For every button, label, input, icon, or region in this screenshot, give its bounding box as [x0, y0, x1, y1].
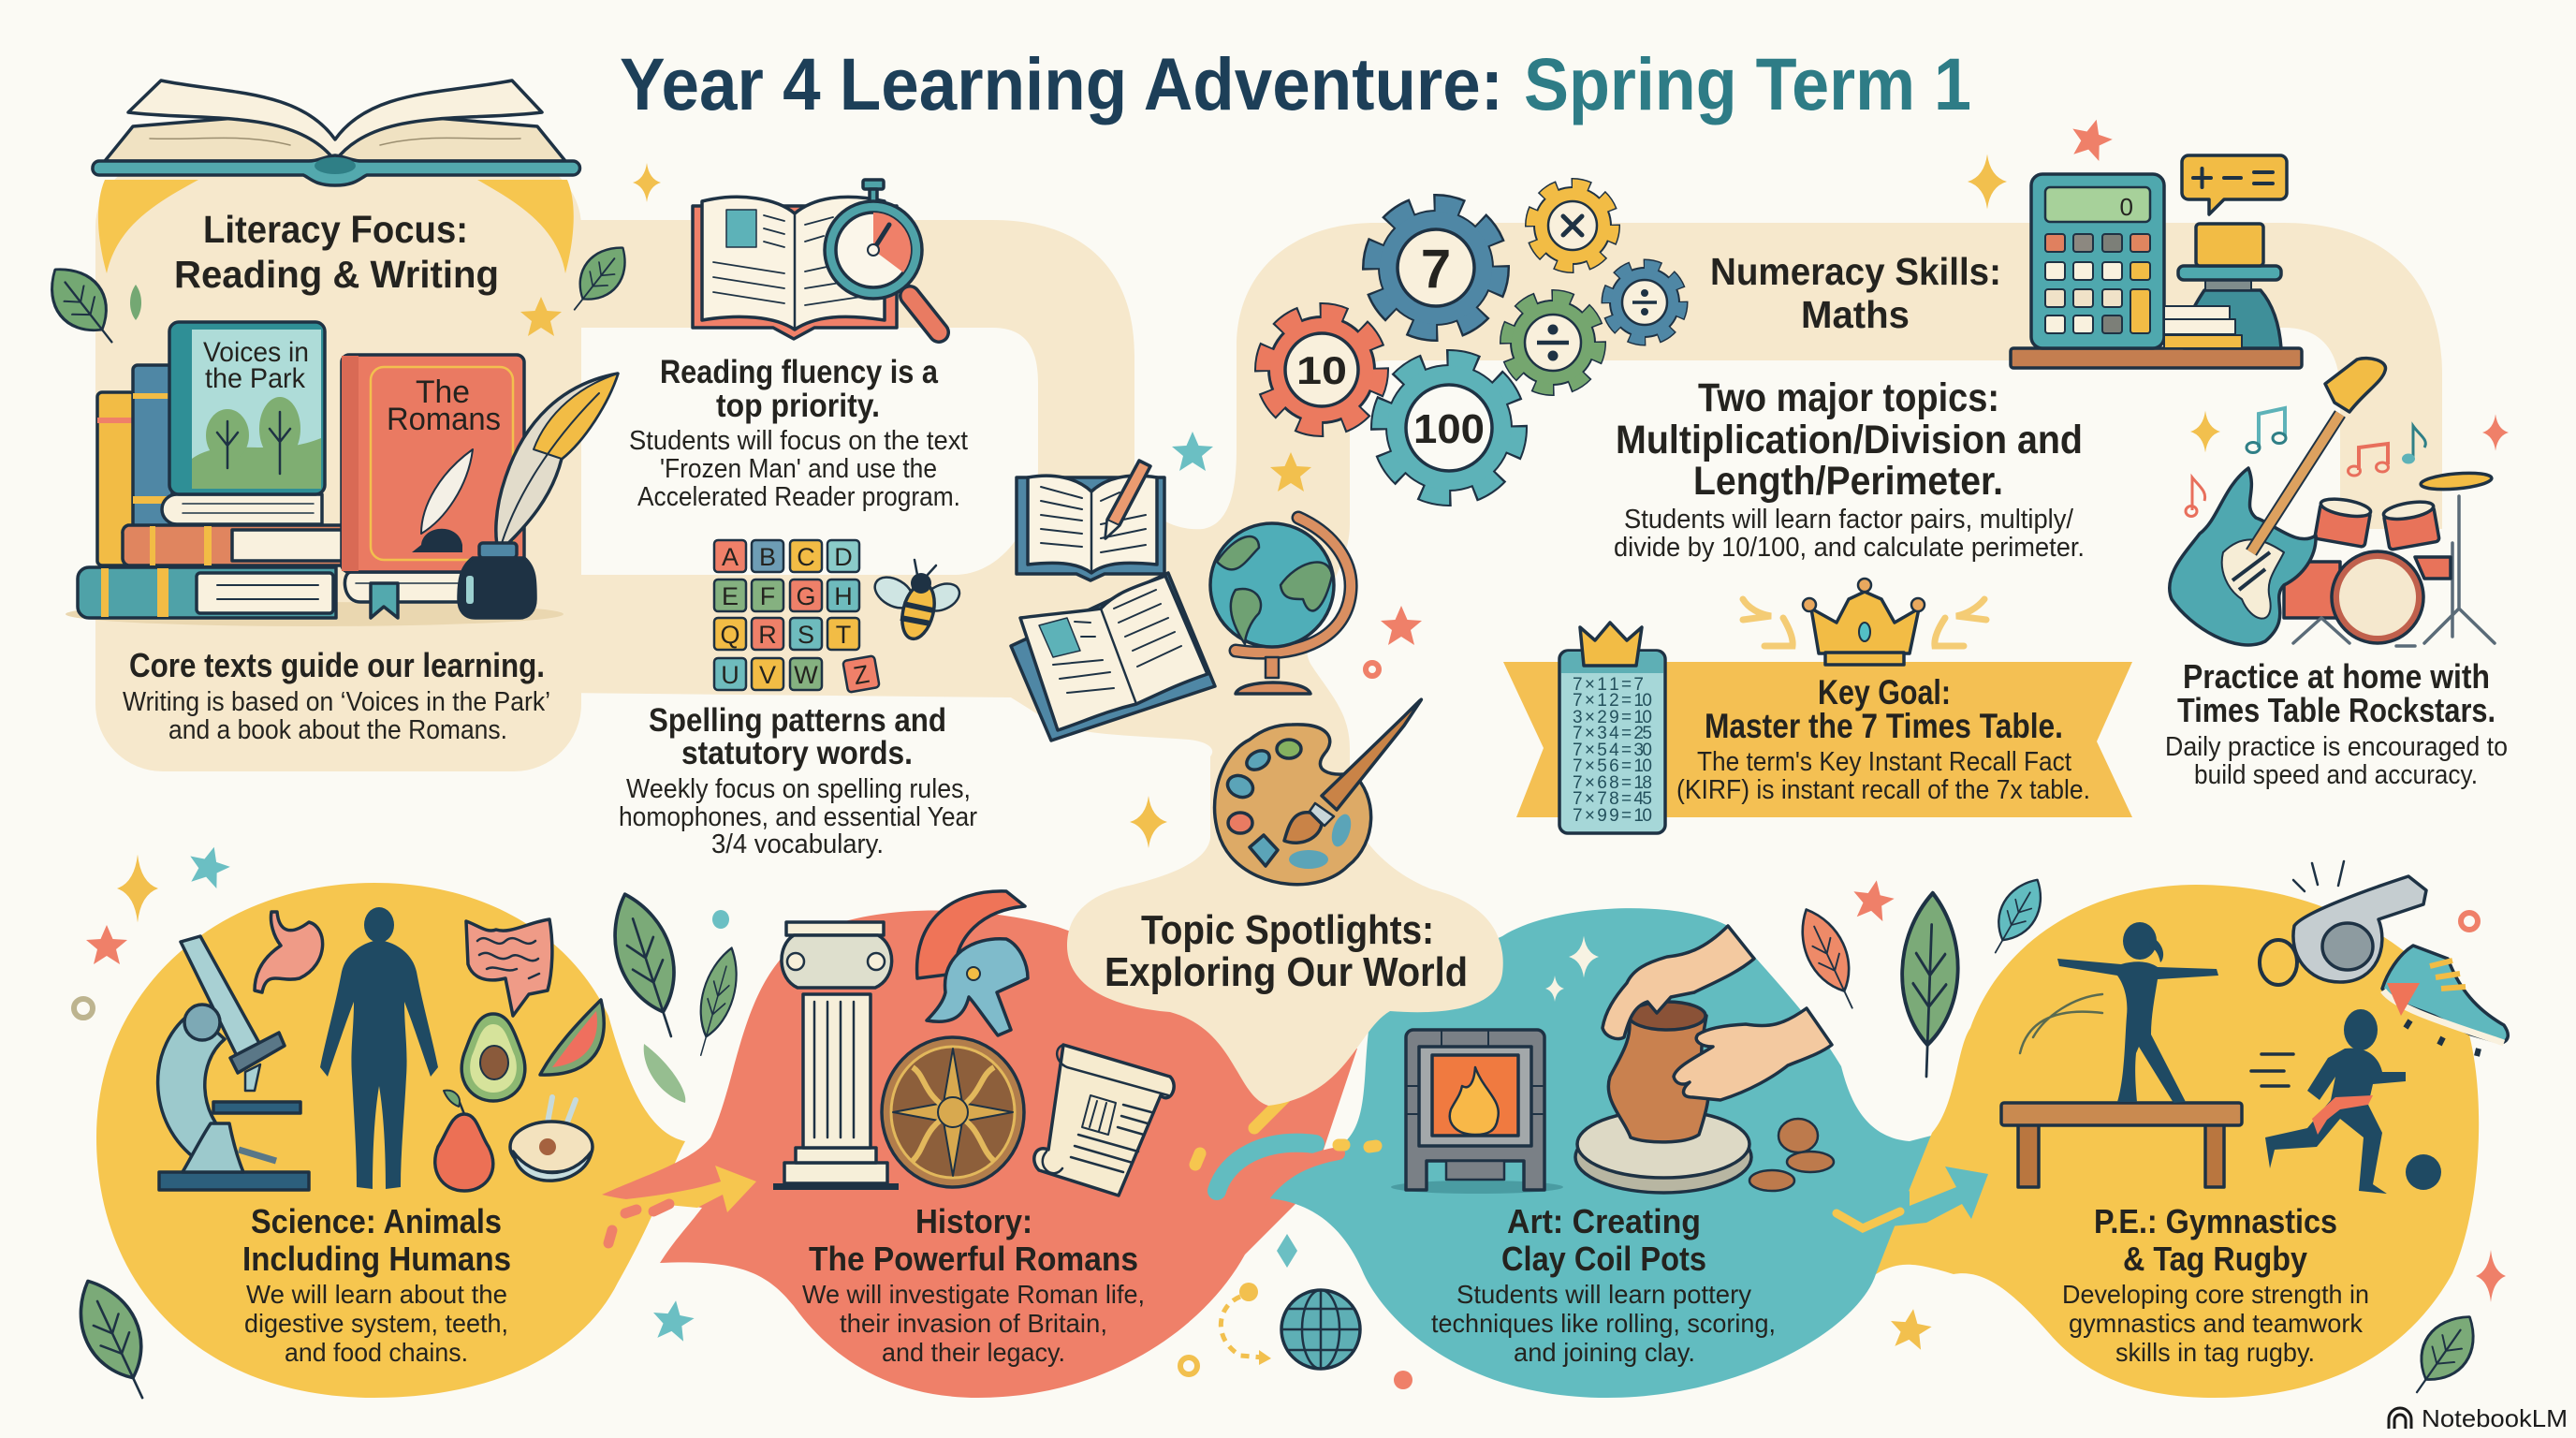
icon: letter tiles: H [834, 582, 853, 610]
art blob [1268, 908, 1988, 1398]
logo: NotebookLM: NotebookLM [2422, 1404, 2568, 1432]
icon: calculator on shelf [1968, 114, 2302, 368]
icon: letter tiles: W [794, 661, 818, 689]
icon: gears [1266, 185, 1681, 495]
icon: watermelon [540, 1000, 604, 1075]
history text: History: [915, 1202, 1032, 1240]
panel: art [1391, 926, 1834, 1367]
times table card [1559, 623, 1665, 833]
text: practice at home: Times Table Rockstars. [2177, 691, 2496, 729]
text: reading fluency: 'Frozen Man' and use the [660, 454, 937, 484]
text: reading fluency [629, 354, 968, 512]
science text [242, 1202, 511, 1367]
icon: letter tiles: V [759, 661, 776, 689]
icon: open book on top [93, 81, 580, 185]
gear: 100 [1382, 360, 1516, 495]
P.E. blob [1876, 885, 2479, 1398]
icon: microscope [158, 936, 309, 1190]
times table card: 7 × 9 9 = 10 [1573, 806, 1652, 826]
icon: globe [1210, 518, 1351, 694]
flow arrow: teal into P.E. [1837, 1167, 1988, 1245]
gear: times [1532, 185, 1613, 266]
sparkles and notes [2186, 408, 2509, 517]
panel heading [174, 208, 499, 296]
panel background [95, 159, 581, 771]
icon: human figure [320, 907, 438, 1189]
ribbon text: Master the 7 Times Table. [1705, 707, 2063, 745]
drums [2284, 471, 2495, 646]
history text [802, 1202, 1145, 1367]
history text: their invasion of Britain, [840, 1309, 1107, 1338]
P.E. text [2062, 1202, 2369, 1367]
panel body text [123, 646, 550, 745]
art text: Clay Coil Pots [1501, 1240, 1706, 1278]
icon: letter tiles: B [759, 543, 776, 571]
history text: and their legacy. [882, 1338, 1065, 1367]
heading: topic spotlights: Topic Spotlights: [1141, 907, 1434, 953]
decorative leaves and stars: bottom [64, 842, 2506, 1409]
ribbon text: The term's Key Instant Recall Fact [1697, 747, 2071, 777]
heading: topic spotlights: Exploring Our World [1105, 949, 1468, 995]
P.E. text: skills in tag rugby. [2115, 1338, 2315, 1367]
icon: letter tiles: F [760, 582, 775, 610]
text: two major topics: Students will learn factor pairs, multiply/ [1624, 505, 2074, 535]
science text: and food chains. [285, 1338, 468, 1367]
times table card: 7 × 3 4 = 25 [1573, 724, 1652, 743]
icon: letter tiles: D [834, 543, 853, 571]
icon: stack of books [66, 365, 564, 626]
science blob [96, 883, 685, 1398]
science text: We will learn about the [246, 1280, 507, 1309]
shelf [2011, 348, 2302, 368]
panel: literacy focus [37, 81, 637, 771]
text: practice at home: Daily practice is encouraged to [2165, 732, 2508, 762]
art text [1431, 1202, 1776, 1367]
panel: P.E. [2001, 861, 2508, 1367]
book: Voices in the Park [162, 322, 325, 524]
right tom [2382, 499, 2439, 550]
callout: key goal ribbon [1503, 579, 2132, 833]
icon: pottery wheel [1575, 1110, 1751, 1193]
icon: bee [870, 560, 964, 642]
text: reading fluency: top priority. [716, 388, 880, 424]
book stand [2164, 224, 2281, 348]
icon: tag rugby runner [2251, 1009, 2441, 1194]
gear: green divide [1508, 298, 1598, 388]
text: practice at home: build speed and accuracy. [2194, 760, 2478, 790]
icon: clay pieces [1749, 1119, 1834, 1191]
science text: Science: Animals [251, 1202, 502, 1240]
heading: numeracy skills: Maths [1801, 293, 1910, 336]
icon: paint palette and brush [1215, 699, 1421, 885]
text: two major topics [1614, 375, 2085, 563]
book: The Romans: Romans [387, 402, 501, 437]
text: two major topics: Multiplication/Division and [1616, 418, 2083, 462]
icon: letter tiles: T [836, 621, 851, 649]
gear: 100: 100 [1413, 406, 1485, 452]
icon: crown with rays [1743, 579, 1986, 665]
text: two major topics: Two major topics: [1698, 375, 1999, 420]
icon: intestines [466, 919, 552, 1016]
book: Voices in the Park: Voices in [203, 337, 309, 368]
times table card: 7 × 1 1 = 7 [1573, 675, 1644, 695]
text: spelling patterns: Spelling patterns and [649, 702, 946, 739]
icon: food bowl [510, 1097, 593, 1181]
science text: Including Humans [242, 1240, 511, 1278]
icon: tilted open book [1011, 573, 1215, 741]
times table card: 7 × 5 6 = 10 [1573, 756, 1652, 776]
ball [2406, 1154, 2441, 1190]
ribbon text: (KIRF) is instant recall of the 7x table. [1676, 775, 2090, 805]
icon: book with stopwatch and magnifier [633, 163, 939, 339]
panel body text: Writing is based on ‘Voices in the Park’ [123, 687, 550, 717]
icon: kiln [1391, 1030, 1563, 1194]
times table card: 7 × 7 8 = 45 [1573, 789, 1652, 809]
title: Spring Term 1 [1524, 42, 1971, 125]
icon: letter tiles: C [797, 543, 815, 571]
icon: roman shield [882, 1037, 1024, 1187]
flow arrow: teal swirl into art [1195, 1095, 1376, 1203]
history text: We will investigate Roman life, [802, 1280, 1145, 1309]
left tom [2315, 496, 2372, 547]
icon: letter tiles: E [722, 582, 739, 610]
text: reading fluency: Students will focus on the text [629, 426, 968, 456]
gear: 7: 7 [1421, 239, 1451, 300]
icon: letter tiles: Z [851, 660, 871, 690]
art text: techniques like rolling, scoring, [1431, 1309, 1776, 1338]
panel: history [773, 891, 1174, 1367]
yellow arcs [98, 180, 574, 273]
icon: letter tiles: G [796, 582, 816, 610]
gear: 7 [1374, 206, 1498, 330]
guitar [2170, 359, 2385, 645]
times table card: 7 × 5 4 = 30 [1573, 741, 1652, 760]
icon: football boot [2382, 946, 2508, 1056]
times table card: 7 × 1 2 = 10 [1573, 691, 1652, 711]
ribbon [1503, 662, 2132, 817]
P.E. text: P.E.: Gymnastics [2094, 1202, 2337, 1240]
icon: quill and ink [459, 374, 618, 618]
calculator [2031, 174, 2164, 348]
book: Voices in the Park: the Park [205, 363, 306, 394]
calculator: 0 [2120, 193, 2133, 221]
times table card: 3 × 2 9 = 10 [1573, 708, 1652, 727]
decorative stars: centre [1130, 432, 1422, 848]
panel body text: Core texts guide our learning. [129, 646, 545, 684]
icon: letter tiles: A [722, 543, 739, 571]
art text: and joining clay. [1514, 1338, 1695, 1367]
icon: guitar and drum kit [2170, 359, 2509, 646]
icon: scroll [1034, 1045, 1174, 1196]
icon: letter tiles [714, 540, 880, 693]
panel heading: Literacy Focus: [203, 208, 468, 251]
icon: whistle [2260, 861, 2426, 985]
gear: 10 [1266, 314, 1378, 426]
title: Year 4 Learning Adventure: [620, 42, 1503, 125]
text: two major topics: divide by 10/100, and calculate perimeter. [1614, 533, 2085, 563]
history blob [602, 910, 1357, 1398]
winding path [562, 220, 2442, 1106]
icon: letter tiles: U [721, 661, 739, 689]
sparkles [1545, 936, 1599, 1002]
heading: numeracy skills [1710, 250, 2001, 336]
icon: roman helmet [917, 891, 1028, 1035]
text: spelling patterns [619, 702, 977, 859]
history text: The Powerful Romans [809, 1240, 1138, 1278]
book: The Romans [342, 355, 524, 618]
speech bubble [2182, 155, 2287, 214]
art text: Art: Creating [1507, 1202, 1701, 1240]
P.E. text: Developing core strength in [2062, 1280, 2369, 1309]
book: The Romans: The [416, 374, 470, 410]
P.E. text: gymnastics and teamwork [2069, 1309, 2364, 1338]
text: two major topics: Length/Perimeter. [1693, 459, 2003, 504]
panel heading: Reading & Writing [174, 253, 499, 296]
text: spelling patterns: Weekly focus on spelling rules, [626, 774, 971, 804]
text: reading fluency: Reading fluency is a [660, 354, 938, 390]
icon: clay pot [1608, 1002, 1709, 1142]
text: practice at home: Practice at home with [2183, 657, 2490, 696]
icon: letter tiles: S [798, 621, 814, 649]
panel body text: and a book about the Romans. [168, 715, 507, 745]
times table card: 7 × 6 8 = 18 [1573, 773, 1652, 793]
art text: Students will learn pottery [1456, 1280, 1751, 1309]
gear: blue divide [1608, 266, 1681, 339]
heading: topic spotlights [1105, 907, 1468, 995]
icon: pear [435, 1091, 493, 1191]
text: spelling patterns: statutory words. [681, 735, 913, 771]
science text: digestive system, teeth, [244, 1309, 508, 1338]
P.E. text: & Tag Rugby [2123, 1240, 2307, 1278]
ribbon text: Key Goal: [1818, 673, 1951, 712]
icon: avocado [461, 1014, 525, 1101]
flow arrow: yellow into history [608, 1166, 756, 1243]
icon: dashed arrow to small globe [1221, 1283, 1360, 1369]
text: spelling patterns: homophones, and essential Year [619, 802, 977, 832]
icon: roman column [773, 922, 899, 1190]
panel: science [158, 907, 604, 1367]
gear: 10: 10 [1296, 348, 1347, 392]
icon: hands [1603, 926, 1832, 1100]
text: practice at home [2165, 657, 2508, 790]
icon: open notebook with pencil [1017, 461, 1164, 580]
heading: numeracy skills: Numeracy Skills: [1710, 250, 2001, 293]
icon: letter tiles: Q [720, 621, 740, 649]
icon: stomach [255, 912, 323, 992]
icon: letter tiles: R [758, 621, 777, 649]
icon: leaves and star [37, 236, 637, 357]
icon: gymnast on beam [2001, 922, 2242, 1187]
text: reading fluency: Accelerated Reader program. [637, 482, 960, 512]
ribbon text [1676, 673, 2090, 805]
text: spelling patterns: 3/4 vocabulary. [711, 829, 884, 859]
